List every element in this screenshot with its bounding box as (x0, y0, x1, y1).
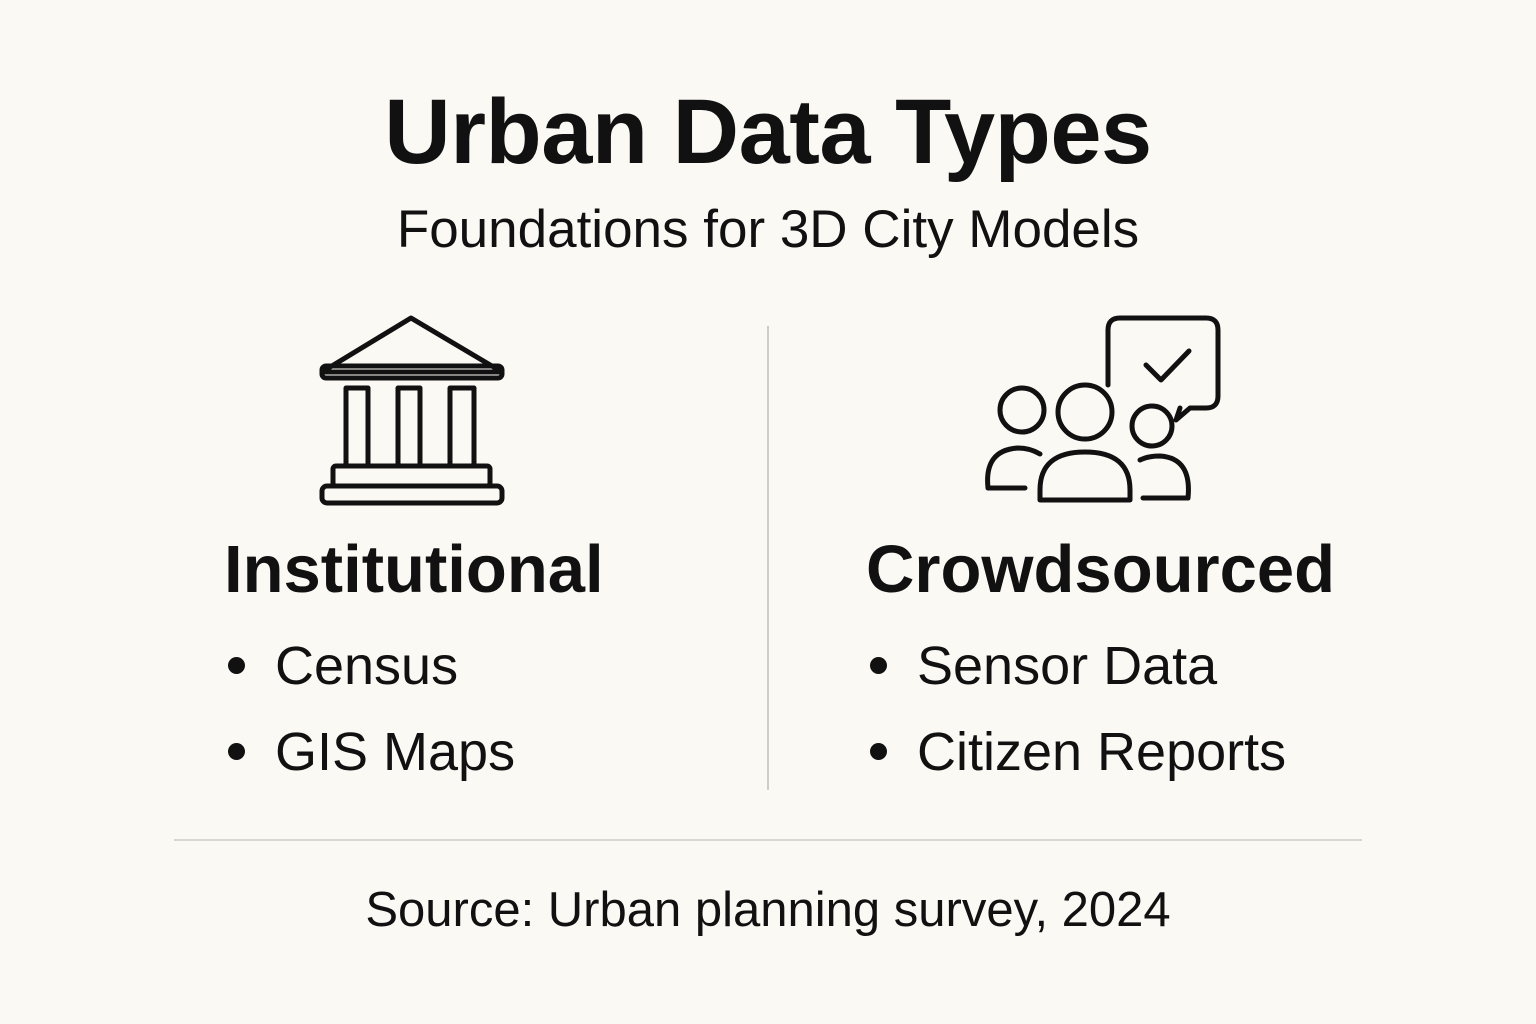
source note: Source: Urban planning survey, 2024 (365, 883, 1171, 937)
icon: institution building (320, 316, 504, 506)
subtitle: Foundations for 3D City Models (397, 200, 1139, 259)
divider horizontal (174, 839, 1362, 841)
list: crowdsourced items: Citizen Reports (917, 722, 1286, 782)
list: crowdsourced items: Sensor Data (917, 636, 1217, 696)
panel: institutional (224, 316, 604, 782)
heading: Institutional: Institutional (224, 532, 604, 607)
list: institutional items: GIS Maps (275, 722, 515, 782)
list: institutional items (228, 636, 515, 782)
title: Urban Data Types (384, 81, 1152, 183)
panel: crowdsourced (866, 316, 1335, 782)
icon: people with speech bubble (985, 316, 1220, 502)
list: crowdsourced items (870, 636, 1286, 782)
list: institutional items: Census (275, 636, 458, 696)
divider vertical (767, 326, 769, 790)
heading: Crowdsourced: Crowdsourced (866, 532, 1335, 607)
